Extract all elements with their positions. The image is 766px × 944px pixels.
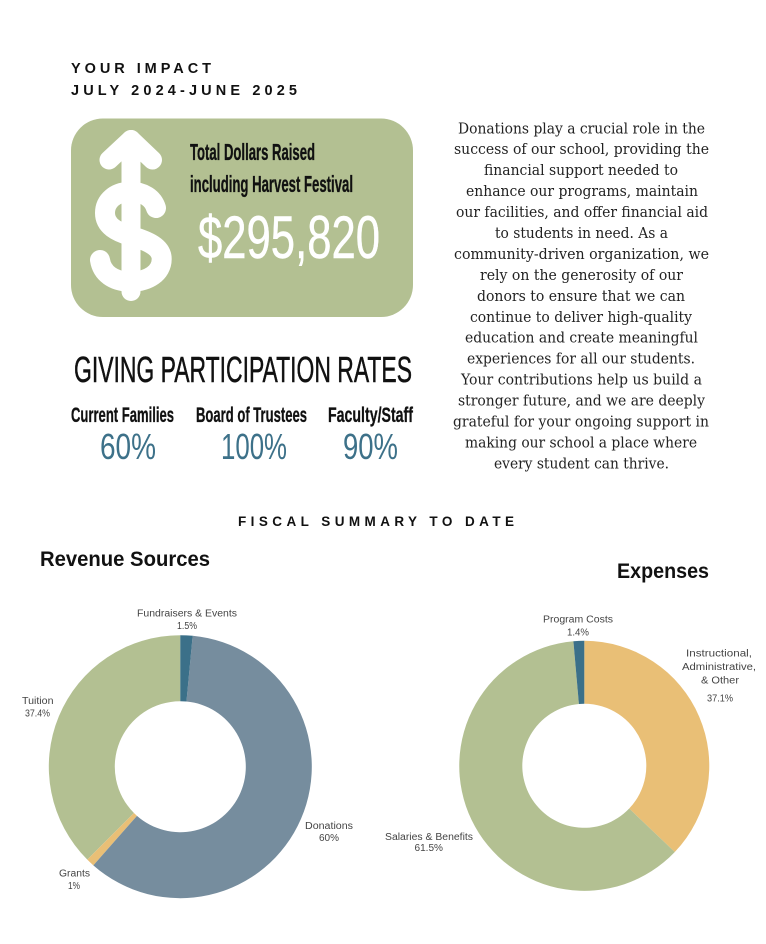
panel: total dollars raised bbox=[71, 118, 413, 317]
text block: donations statement: financial support needed to bbox=[484, 161, 678, 179]
stat: board of trustees: Board of Trustees bbox=[196, 404, 307, 427]
stat: board of trustees: 100% bbox=[221, 426, 287, 467]
title: your impact and date range bbox=[71, 61, 297, 99]
label: program costs: Program Costs bbox=[543, 615, 613, 626]
heading: fiscal summary to date: FISCAL SUMMARY TO DATE bbox=[238, 514, 514, 529]
stat: current families: 60% bbox=[100, 426, 156, 467]
label: program costs bbox=[543, 615, 613, 639]
label: program costs: 1.4% bbox=[567, 628, 589, 639]
text block: donations statement: education and create meaningful bbox=[465, 329, 698, 347]
text block: donations statement: our facilities, and offer financial aid bbox=[456, 203, 708, 221]
stat: faculty and staff: 90% bbox=[343, 426, 398, 467]
label: grants: 1% bbox=[68, 881, 80, 892]
text block: donations statement: to students in need. As a bbox=[495, 224, 668, 242]
stat: faculty and staff: Faculty/Staff bbox=[328, 404, 414, 427]
label: instructional, administrative and other: Administrative, bbox=[682, 662, 756, 673]
text block: donations statement: experiences for all our students. bbox=[467, 350, 695, 368]
label: fundraisers and events: 1.5% bbox=[177, 621, 197, 632]
text block: donations statement: continue to deliver high-quality bbox=[470, 308, 692, 326]
donut chart: expenses bbox=[459, 641, 709, 891]
stat: board of trustees bbox=[196, 404, 307, 467]
text block: donations statement: making our school a place where bbox=[465, 433, 697, 451]
heading: giving participation rates: GIVING PARTICIPATION RATES bbox=[74, 349, 412, 390]
label: instructional, administrative and other: 37.1% bbox=[707, 694, 733, 705]
slice: fundraisers and events bbox=[180, 635, 193, 701]
text block: donations statement: donors to ensure that we can bbox=[477, 287, 685, 305]
label: donations: Donations bbox=[305, 821, 353, 832]
slice: instructional, administrative and other bbox=[584, 641, 709, 852]
label: total dollars raised bbox=[190, 139, 353, 197]
label: tuition bbox=[22, 696, 54, 720]
label: total dollars raised: Total Dollars Raised bbox=[190, 139, 315, 165]
title: your impact and date range: YOUR IMPACT bbox=[71, 61, 211, 77]
text block: donations statement: Your contributions help us build a bbox=[460, 371, 702, 389]
donut chart: revenue sources bbox=[49, 635, 312, 898]
text block: donations statement: every student can thrive. bbox=[494, 454, 669, 472]
slice: program costs bbox=[573, 641, 584, 704]
text block: donations statement: enhance our programs, maintain bbox=[466, 182, 698, 200]
slice: tuition bbox=[49, 635, 180, 860]
text block: donations statement: success of our school, providing the bbox=[454, 140, 709, 158]
label: donations bbox=[305, 821, 353, 844]
label: total dollars raised: including Harvest Festival bbox=[190, 171, 353, 197]
slice: donations bbox=[93, 636, 312, 898]
stat: current families: Current Families bbox=[71, 404, 174, 427]
slice: grants bbox=[87, 813, 137, 865]
icon: dollar sign with up arrow bbox=[100, 140, 162, 292]
text block: donations statement: rely on the generosity of our bbox=[480, 266, 684, 284]
label: fundraisers and events: Fundraisers & Events bbox=[137, 609, 237, 620]
label: instructional, administrative and other: & Other bbox=[701, 676, 740, 687]
title: your impact and date range: JULY 2024-JUNE 2025 bbox=[71, 83, 297, 99]
label: tuition: 37.4% bbox=[25, 709, 50, 720]
label: instructional, administrative and other bbox=[682, 649, 756, 705]
heading: expenses: Expenses bbox=[617, 560, 709, 583]
label: tuition: Tuition bbox=[22, 696, 54, 707]
amount raised: $295,820 bbox=[198, 204, 380, 271]
slice: salaries and benefits bbox=[459, 641, 675, 891]
text block: donations statement: grateful for your ongoing support in bbox=[453, 412, 709, 430]
label: salaries and benefits: 61.5% bbox=[414, 843, 443, 854]
text block: donations statement: stronger future, and we are deeply bbox=[458, 392, 705, 410]
label: instructional, administrative and other: Instructional, bbox=[686, 649, 752, 660]
label: grants: Grants bbox=[59, 869, 90, 880]
label: grants bbox=[59, 869, 90, 892]
text block: donations statement: Donations play a crucial role in the bbox=[458, 119, 705, 137]
label: salaries and benefits: Salaries & Benefits bbox=[385, 832, 473, 843]
text block: donations statement bbox=[453, 119, 709, 472]
label: salaries and benefits bbox=[385, 832, 473, 854]
label: donations: 60% bbox=[319, 833, 339, 844]
label: fundraisers and events bbox=[137, 609, 237, 632]
stat: faculty and staff bbox=[328, 404, 414, 467]
text block: donations statement: community-driven organization, we bbox=[454, 245, 709, 263]
heading: revenue sources: Revenue Sources bbox=[40, 548, 210, 571]
stat: current families bbox=[71, 404, 174, 467]
